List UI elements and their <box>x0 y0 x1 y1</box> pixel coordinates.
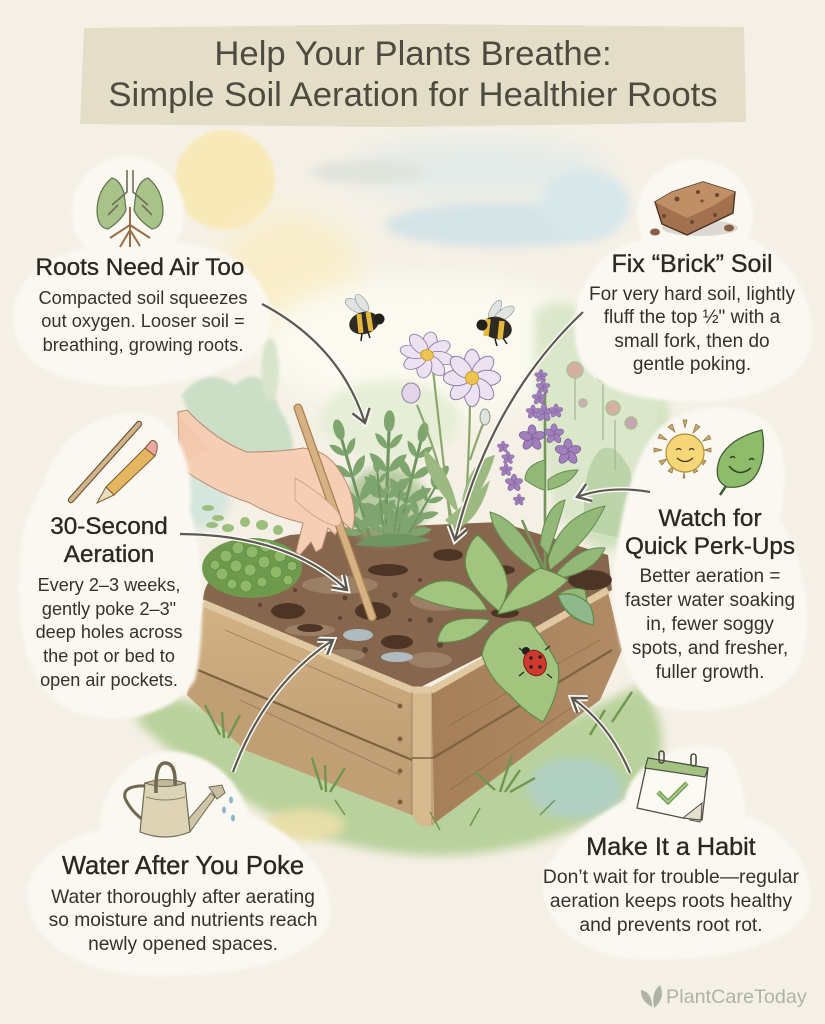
text block: fix brick soil: fluff the top ½" with a <box>604 307 780 328</box>
bee left <box>343 292 384 341</box>
left low plant <box>202 505 302 598</box>
icon: smiling sun and leaf <box>654 420 764 495</box>
logo text: PlantCareToday <box>666 986 807 1008</box>
arrows <box>180 304 650 773</box>
ladybug <box>519 646 552 679</box>
arrows halo <box>180 304 650 773</box>
grass tufts <box>205 692 632 830</box>
text block: fix brick soil: gentle poking. <box>633 354 751 375</box>
icon: lungs with roots <box>97 170 163 247</box>
stick tool <box>298 408 372 617</box>
text block: 30-second aeration: open air pockets. <box>40 670 178 690</box>
pale background flowers <box>567 362 637 470</box>
icon: watering can <box>125 763 235 837</box>
thumb over stick <box>295 478 341 526</box>
text block: make it a habit <box>543 833 799 936</box>
text block: make it a habit: and prevents root rot. <box>579 915 763 936</box>
text block: 30-second aeration: Aeration <box>64 541 154 568</box>
pale background foliage <box>170 302 670 550</box>
text block: fix brick soil: For very hard soil, lightly <box>589 284 795 305</box>
text block: roots need air too <box>36 254 247 355</box>
icon: brick <box>650 182 738 236</box>
text block: watch for quick perk-ups: Better aeration = <box>639 566 780 586</box>
text block: fix brick soil: Fix “Brick” Soil <box>611 250 773 278</box>
text block: water after you poke: Water thoroughly after aerating <box>51 886 315 908</box>
text block: 30-second aeration: the pot or bed to <box>43 646 175 666</box>
text block: 30-second aeration: gently poke 2–3" <box>42 599 176 619</box>
text block: 30-second aeration: 30-Second <box>50 513 168 540</box>
text block: watch for quick perk-ups: in, fewer soggy <box>646 614 774 634</box>
title: Help Your Plants Breathe: <box>214 35 612 73</box>
text block: roots need air too: Roots Need Air Too <box>36 254 244 281</box>
icon: dowel and pencil <box>71 424 157 503</box>
text block: make it a habit: aeration keeps roots healthy <box>550 891 792 912</box>
text block: water after you poke: newly opened spaces. <box>88 934 278 955</box>
text block: fix brick soil: small fork, then do <box>614 331 770 352</box>
lavender <box>490 369 605 625</box>
text block: make it a habit: Don’t wait for trouble—regular <box>543 867 799 888</box>
bee right <box>476 298 517 346</box>
text block: watch for quick perk-ups: faster water soaking <box>625 590 795 610</box>
tall flowers <box>395 326 501 530</box>
text block: make it a habit: Make It a Habit <box>586 833 756 861</box>
herb cluster <box>307 409 463 554</box>
text block: water after you poke <box>49 852 317 955</box>
hand <box>178 410 354 555</box>
text block: watch for quick perk-ups: Quick Perk-Ups <box>625 533 795 560</box>
raised bed <box>187 522 622 826</box>
logo mark <box>641 985 662 1008</box>
text block: watch for quick perk-ups: spots, and fresher, <box>632 638 788 658</box>
title <box>108 35 718 114</box>
text block: roots need air too: Compacted soil squeezes <box>38 287 247 308</box>
text block: roots need air too: breathing, growing roots. <box>43 334 243 355</box>
white panels <box>13 156 812 976</box>
text block: watch for quick perk-ups: Watch for <box>658 505 762 532</box>
grass ground <box>135 685 662 856</box>
text block: fix brick soil <box>589 250 795 375</box>
title: Simple Soil Aeration for Healthier Roots <box>108 76 718 114</box>
text block: watch for quick perk-ups: fuller growth. <box>656 662 764 682</box>
text block: roots need air too: out oxygen. Looser soil = <box>41 310 245 331</box>
text block: 30-second aeration: deep holes across <box>36 622 182 642</box>
text block: water after you poke: Water After You Poke <box>62 852 304 880</box>
text block: watch for quick perk-ups <box>625 505 795 682</box>
banner <box>80 24 746 127</box>
text block: water after you poke: so moisture and nutrients reach <box>49 910 317 931</box>
icon: calendar <box>637 751 708 822</box>
sky wash <box>175 130 630 415</box>
text block: 30-second aeration: Every 2–3 weeks, <box>38 575 180 595</box>
text block: 30-second aeration <box>36 513 182 690</box>
front plant leaves <box>413 535 594 722</box>
